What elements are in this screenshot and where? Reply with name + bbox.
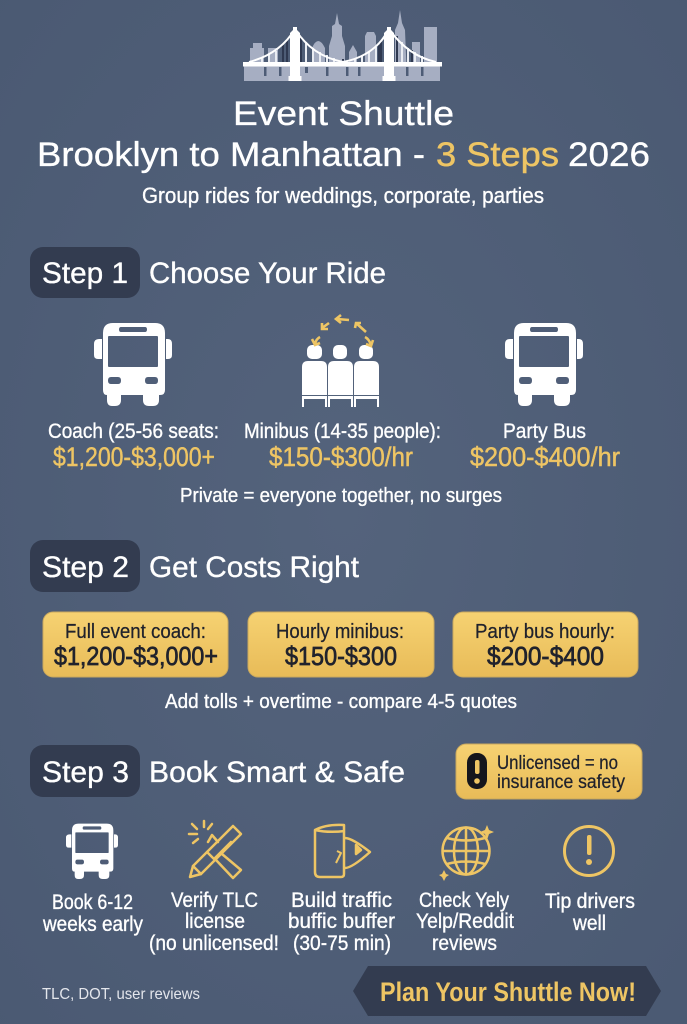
booking tips text: Check Yely [419,889,509,912]
subtitle: Group rides for weddings, corporate, parties [142,183,544,208]
title [37,95,650,174]
cost card: minibus: Hourly minibus: [276,621,404,643]
booking tips text: Yelp/Reddit [416,910,514,933]
step 3 heading: Step 3 [42,756,129,789]
icon: exclamation circle [564,826,614,876]
booking tips text: Book 6-12 [52,891,133,914]
step 1 heading [30,247,386,298]
callout: unlicensed warning [456,744,642,799]
icon: coach bus [94,323,172,406]
booking tips text: weeks early [42,913,143,936]
cost card: minibus [248,612,434,677]
note: tolls: Add tolls + overtime - compare 4-5 quotes [165,691,517,713]
icon: party bus [505,323,583,406]
ride options text: Minibus (14-35 people): [244,420,441,443]
booking tips text: (no unlicensed! [149,932,279,955]
callout: unlicensed warning: insurance safety [497,772,625,793]
icon: globe [439,825,494,881]
booking tips text [42,889,635,955]
booking tips text: reviews [432,932,497,955]
step 2 heading [30,540,360,592]
step 1 heading: Step 1 [42,257,128,290]
title: Brooklyn to Manhattan - [37,136,425,174]
ride options text: $150-$300/hr [269,442,413,472]
icon: pen and wrench [189,821,241,878]
cost card: coach [43,612,228,677]
title: Event Shuttle [233,95,454,133]
icon: mug [315,825,370,877]
booking tips text: (30-75 min) [293,932,391,955]
title: 2026 [568,136,650,174]
cost card: party bus [453,612,638,677]
ride options text: $1,200-$3,000+ [53,442,215,472]
step 1 heading: Choose Your Ride [149,257,386,290]
booking tips text: Tip drivers [545,890,635,913]
ride options text: Party Bus [503,420,586,443]
ride options text: Coach (25-56 seats: [48,420,219,443]
cost card: coach: Full event coach: [65,621,206,643]
cost card: coach: $1,200-$3,000+ [54,641,218,671]
booking tips text: license [185,910,245,933]
cost card: party bus: $200-$400 [487,641,604,671]
call to action button [353,966,661,1016]
note: private: Private = everyone together, no surges [180,485,502,507]
cost card: party bus: Party bus hourly: [475,621,615,643]
cost card: minibus: $150-$300 [285,641,397,671]
callout: unlicensed warning: Unlicensed = no [497,753,618,774]
source note: TLC, DOT, user reviews [42,986,200,1003]
ride options text [48,420,620,472]
booking tips text: buffic buffer [288,910,395,933]
step 2 heading: Step 2 [42,551,129,584]
step 2 heading: Get Costs Right [149,551,360,584]
title: 3 Steps [436,136,559,174]
call to action button: Plan Your Shuttle Now! [380,977,636,1007]
icon: minibus seats with arrows [302,315,379,407]
icon: bridge and skyline [243,10,442,81]
booking tips text: Build traffic [291,889,392,912]
booking tips text: well [572,912,606,935]
step 3 heading: Book Smart & Safe [149,756,405,789]
ride options text: $200-$400/hr [470,442,620,472]
booking tips text: Verify TLC [171,889,258,912]
icon: small bus [66,824,118,879]
step 3 heading [30,745,405,797]
